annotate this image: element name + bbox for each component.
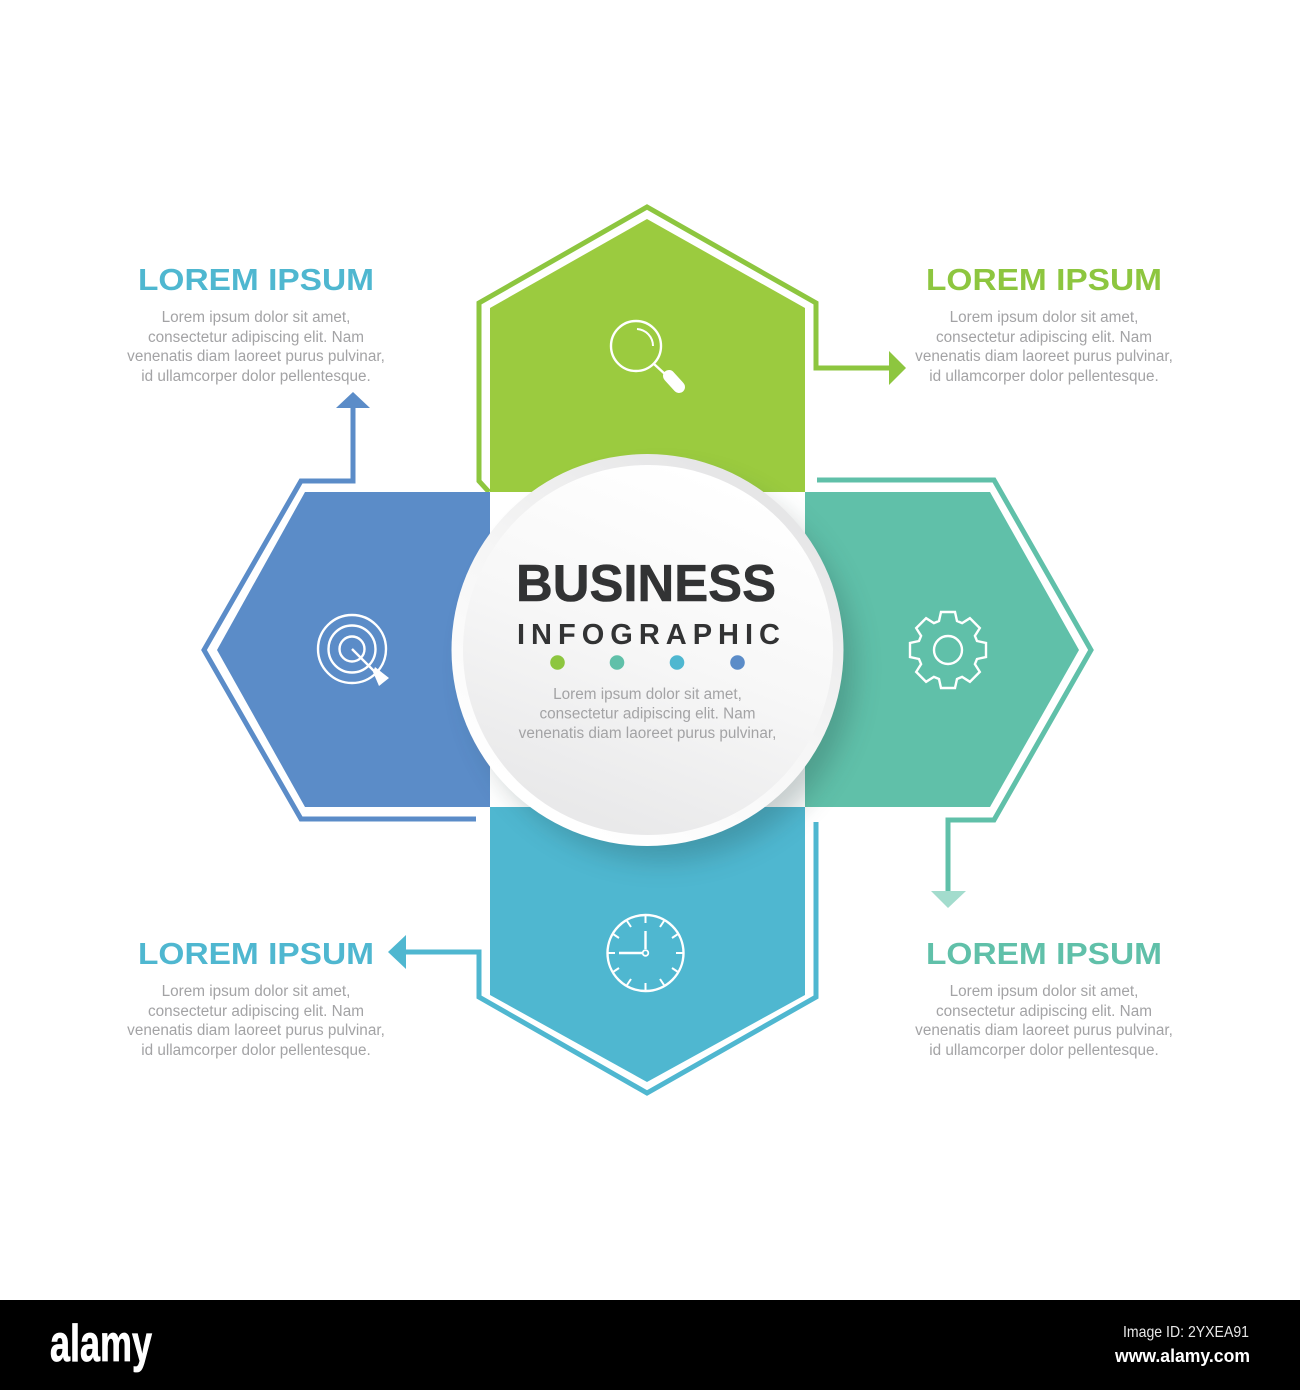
footer image id: Image ID: 2YXEA91 bbox=[1123, 1324, 1249, 1341]
text block: top left: Lorem ipsum dolor sit amet, bbox=[162, 309, 350, 326]
heading: top right: LOREM IPSUM bbox=[926, 262, 1162, 297]
panel: central circle bbox=[452, 454, 844, 846]
icon: clock bbox=[608, 915, 684, 991]
text block: bottom left: Lorem ipsum dolor sit amet, bbox=[162, 983, 350, 1000]
panel: green hexagon bbox=[479, 207, 906, 492]
text block: bottom right: Lorem ipsum dolor sit amet, bbox=[950, 983, 1138, 1000]
text block: bottom right: id ullamcorper dolor pellentesque. bbox=[929, 1042, 1159, 1059]
icon: target with arrow bbox=[318, 615, 389, 686]
heading: bottom right: LOREM IPSUM bbox=[926, 936, 1162, 971]
white square behind the central circle bbox=[490, 492, 805, 807]
heading: top left: LOREM IPSUM bbox=[138, 262, 374, 297]
heading: infographic: INFOGRAPHIC bbox=[517, 619, 780, 651]
text block: top right: id ullamcorper dolor pellentesque. bbox=[929, 368, 1159, 385]
text block: top left: venenatis diam laoreet purus pulvinar, bbox=[127, 348, 385, 365]
text block: top right: Lorem ipsum dolor sit amet, bbox=[950, 309, 1138, 326]
arrow: green outline to top right text bbox=[479, 207, 906, 492]
colored dots bbox=[550, 655, 745, 670]
heading: business: BUSINESS bbox=[516, 555, 776, 613]
text block: center description: Lorem ipsum dolor sit amet, bbox=[553, 686, 742, 703]
text block: top left: consectetur adipiscing elit. Nam bbox=[148, 329, 364, 346]
icon: magnifying glass bbox=[611, 321, 679, 387]
text panel: bottom right bbox=[915, 936, 1173, 1059]
icon: gear bbox=[910, 612, 986, 688]
text block: bottom right: venenatis diam laoreet purus pulvinar, bbox=[915, 1022, 1173, 1039]
text block: bottom left: id ullamcorper dolor pellentesque. bbox=[141, 1042, 371, 1059]
footer bar bbox=[0, 1300, 1300, 1390]
arrow: cyan outline to bottom left text bbox=[388, 822, 816, 1093]
text panel: top right bbox=[915, 262, 1173, 385]
panel: teal hexagon bbox=[805, 480, 1091, 908]
text block: top right: venenatis diam laoreet purus pulvinar, bbox=[915, 348, 1173, 365]
circle shadow bbox=[470, 476, 854, 860]
text block: top left: id ullamcorper dolor pellentesque. bbox=[141, 368, 371, 385]
text block: bottom left: venenatis diam laoreet purus pulvinar, bbox=[127, 1022, 385, 1039]
footer url: www.alamy.com bbox=[1114, 1346, 1250, 1366]
text block: center description: consectetur adipiscing elit. Nam bbox=[540, 706, 755, 722]
panel: blue hexagon bbox=[204, 392, 490, 819]
arrow: blue outline to top left text bbox=[204, 392, 476, 819]
text block: bottom right: consectetur adipiscing elit. Nam bbox=[936, 1003, 1152, 1020]
text block: bottom left: consectetur adipiscing elit. Nam bbox=[148, 1003, 364, 1020]
panel: cyan hexagon bbox=[388, 807, 816, 1093]
text block: center description: venenatis diam laoreet purus pulvinar, bbox=[519, 725, 776, 742]
footer logo: alamy bbox=[50, 1315, 152, 1373]
text block: top right: consectetur adipiscing elit. Nam bbox=[936, 329, 1152, 346]
arrow: teal outline to bottom right text bbox=[817, 480, 1091, 908]
text panel: bottom left bbox=[127, 936, 385, 1059]
text panel: top left bbox=[127, 262, 385, 385]
heading: bottom left: LOREM IPSUM bbox=[138, 936, 374, 971]
